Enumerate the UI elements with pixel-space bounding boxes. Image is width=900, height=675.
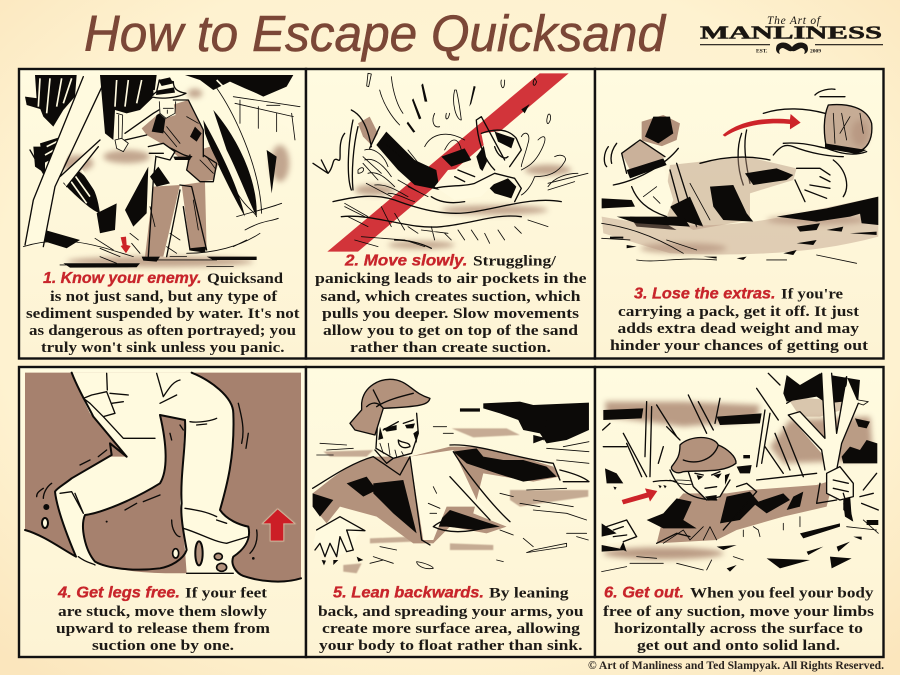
text: step 5: your body to float rather than sink. [319, 638, 583, 654]
illustration: explorer in jungle [23, 75, 300, 268]
text: step 3: adds extra dead weight and may [618, 321, 860, 337]
text: step 3 [610, 286, 868, 354]
text: step 2: Struggling/ [473, 254, 557, 270]
text: step 2: panicking leads to air pockets in the [315, 271, 587, 287]
text: step 5: create more surface area, allowing [322, 621, 581, 637]
text: step 6: free of any suction, move your limbs [603, 604, 874, 620]
panel: 3 lose the extras [595, 69, 884, 358]
text: step 6 [603, 585, 874, 654]
text: step 4: If your feet [185, 586, 267, 602]
icon: red curved arrow [723, 114, 801, 137]
illustration: man throwing off pack [602, 89, 878, 263]
text: step 5: 5. Lean backwards. [333, 585, 484, 602]
logo: The Art of Manliness: EST. [756, 48, 768, 54]
text: step 1: Quicksand [207, 271, 284, 287]
text: step 6: horizontally across the surface to [614, 621, 863, 637]
illustration: man crawling out [602, 373, 878, 572]
text: step 4: are stuck, move them slowly [58, 604, 268, 620]
text: step 2: allow you to get on top of the sand [323, 323, 579, 339]
text: step 3: hinder your chances of getting out [610, 338, 868, 354]
text: step 2: sand, which creates suction, which [320, 289, 581, 305]
text: step 3: If you're [781, 286, 843, 302]
text: step 1: is not just sand, but any type of [50, 289, 278, 305]
text: step 2 [315, 252, 587, 356]
panel: 2 move slowly [306, 69, 595, 358]
illustration: struggling figure crossed out [313, 73, 588, 252]
copyright: © Art of Manliness and Ted Slampyak. All Rights Reserved. [588, 660, 884, 672]
panel: 1 know your enemy [19, 69, 306, 358]
text: step 2: pulls you deeper. Slow movements [322, 306, 579, 322]
logo: The Art of Manliness: The Art of [767, 15, 822, 27]
logo: The Art of Manliness [700, 15, 883, 54]
title: How to Escape Quicksand [84, 5, 667, 62]
text: step 5: By leaning [489, 586, 569, 602]
icon: red up arrow [263, 509, 294, 541]
text: step 6: When you feel your body [690, 586, 874, 602]
text: step 5 [318, 585, 584, 654]
text: step 4 [56, 585, 271, 654]
text: step 2: 2. Move slowly. [344, 252, 468, 270]
icon: red prohibition stripe [327, 73, 569, 252]
text: step 1: truly won't sink unless you panic. [41, 340, 285, 356]
illustration: legs in quicksand [25, 373, 301, 582]
text: step 1: as dangerous as often portrayed; you [29, 323, 296, 339]
text: step 3: 3. Lose the extras. [634, 286, 776, 302]
icon: moustache [776, 43, 808, 54]
text: step 6: 6. Get out. [604, 585, 684, 602]
panel: 5 lean backwards [306, 367, 595, 657]
text: step 5: back, and spreading your arms, you [318, 604, 584, 620]
logo: The Art of Manliness: MANLINESS [700, 22, 882, 42]
text: step 1 [26, 270, 300, 356]
logo: The Art of Manliness: 2009 [810, 48, 821, 54]
text: step 1: sediment suspended by water. It's not [26, 306, 300, 322]
text: step 4: upward to release them from [56, 621, 271, 637]
illustration: man leaning back [313, 379, 589, 573]
text: step 2: rather than create suction. [350, 340, 551, 356]
panel: 6 get out [595, 367, 884, 657]
text: step 1: 1. Know your enemy. [43, 270, 202, 287]
text: step 3: carrying a pack, get it off. It just [618, 304, 859, 320]
text: step 6: get out and onto solid land. [637, 638, 840, 654]
text: step 4: suction one by one. [92, 638, 234, 654]
icon: red arrow [622, 488, 657, 504]
text: step 4: 4. Get legs free. [57, 585, 180, 602]
panel: 4 get legs free [19, 367, 306, 657]
